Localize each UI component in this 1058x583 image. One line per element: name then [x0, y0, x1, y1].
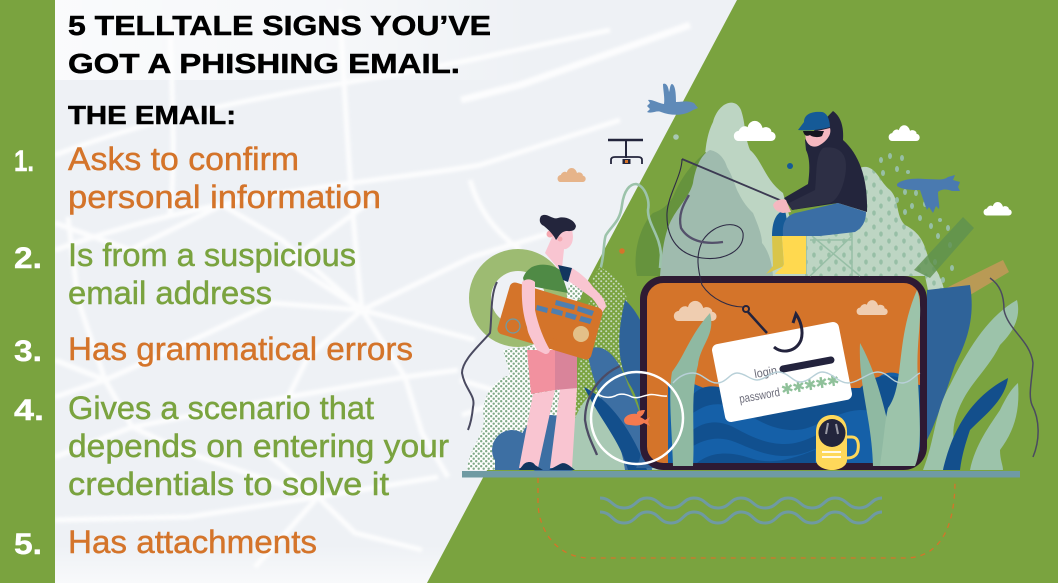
list item 2: Is from a suspicious [68, 237, 356, 273]
list numbers: 3. [14, 335, 42, 368]
list item 1: personal information [68, 179, 381, 215]
subheading: THE EMAIL: [68, 100, 236, 130]
list item 1 [68, 141, 381, 215]
blue bush [492, 415, 585, 475]
list item 4: depends on entering your [68, 428, 449, 464]
chair [806, 224, 860, 276]
jacket [784, 111, 867, 212]
right wiggly line [990, 278, 1038, 457]
dotted spray [879, 153, 954, 283]
head [556, 230, 573, 249]
plants inside tablet right [860, 290, 920, 466]
hand [773, 199, 791, 213]
list numbers: 2. [14, 242, 42, 275]
list item 4: credentials to solve it [68, 466, 389, 502]
face [805, 128, 830, 147]
list item 3: Has grammatical errors [68, 331, 413, 367]
light green ring [480, 260, 556, 336]
tape strips [914, 217, 1009, 320]
list item 1: Asks to confirm [68, 141, 299, 177]
shirt [523, 265, 568, 293]
title [68, 10, 491, 79]
dotted hill [806, 167, 945, 300]
mountains behind fisherman [635, 103, 806, 276]
password label: password [738, 385, 781, 406]
left green strip [0, 0, 55, 583]
shoes [519, 462, 575, 470]
list item 2 [68, 237, 356, 311]
list numbers [14, 145, 44, 561]
icon: coffee mug [816, 415, 858, 470]
front arm [522, 279, 550, 354]
boots [766, 236, 784, 274]
pale wave line [673, 372, 920, 383]
neck and back arm [545, 235, 606, 313]
icon: blue bird left [647, 84, 698, 115]
fishing hook [743, 306, 802, 351]
password stars: ✱✱✱✱✱ [780, 371, 841, 399]
icon: fish [624, 410, 650, 426]
credit card [503, 288, 597, 354]
list numbers: 1. [14, 145, 34, 178]
tablet screen orange [647, 283, 920, 463]
list numbers: 5. [14, 528, 42, 561]
list numbers: 4. [14, 394, 44, 427]
tablet [640, 276, 930, 471]
icon: white clouds [734, 121, 1012, 216]
sunglasses [803, 131, 824, 137]
list item 4: Gives a scenario that [68, 390, 374, 426]
person holding card [503, 215, 606, 470]
right green diagonal panel [427, 0, 1058, 583]
login bar [783, 360, 831, 369]
login label: login [753, 363, 778, 381]
icon: peach cloud [558, 168, 586, 182]
plants left of tablet [560, 300, 680, 470]
fishing line [667, 159, 782, 307]
list item 2: email address [68, 275, 272, 311]
trousers [772, 210, 790, 236]
dotted shrubs behind person [467, 267, 630, 470]
login card [718, 328, 846, 416]
wave lines [600, 498, 882, 523]
icon: drone [608, 140, 643, 164]
water wave line [598, 394, 667, 398]
tablet screen water [668, 373, 925, 470]
legs [519, 388, 577, 468]
hat [798, 112, 830, 130]
dashed path [538, 478, 955, 558]
ear and cheek [546, 230, 562, 242]
sleeve [789, 147, 846, 210]
hanging vine [597, 184, 661, 278]
small dots [619, 134, 793, 254]
ground bar [462, 471, 1020, 478]
plant inside tablet left [670, 313, 711, 466]
arc brush stroke [585, 366, 620, 455]
shorts [527, 350, 555, 394]
sleeve [558, 265, 572, 282]
list item 4 [68, 390, 449, 502]
left wiggly line [462, 282, 497, 430]
icon: blue bird right [897, 175, 960, 213]
magnifier circle [591, 372, 683, 464]
list item 5: Has attachments [68, 524, 317, 560]
title: 5 TELLTALE SIGNS YOU’VE [68, 10, 491, 41]
hair [540, 215, 576, 240]
plants right of tablet [923, 285, 1018, 470]
tablet clouds [674, 300, 888, 321]
tablet water waves [693, 376, 920, 463]
fisherman [766, 111, 867, 276]
title: GOT A PHISHING EMAIL. [68, 48, 460, 79]
